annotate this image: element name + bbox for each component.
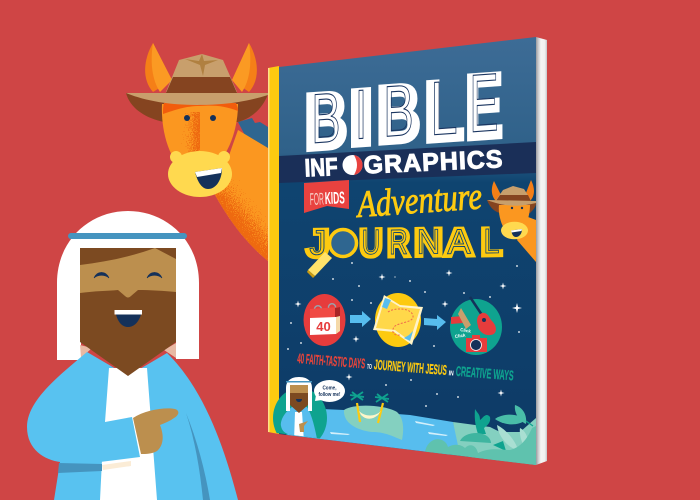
pie chart O (342, 155, 363, 175)
tagline (297, 353, 514, 380)
head top shadow (163, 103, 238, 114)
icon: creative tools circle: Click (454, 332, 466, 339)
title: BIBLE: L (430, 64, 458, 152)
book cover (279, 37, 536, 470)
tagline: IN (448, 370, 454, 378)
face (80, 248, 176, 298)
for kids ribbon: FOR (309, 190, 324, 209)
mini face (290, 385, 308, 393)
magnifying glass (307, 230, 356, 278)
hat brim (126, 93, 268, 105)
for kids ribbon: KIDS (324, 188, 345, 208)
hat pinch (185, 54, 218, 76)
tagline: JOURNEY WITH JESUS (374, 356, 448, 378)
book spine (268, 66, 279, 434)
title: INFOGRAPHICS (305, 150, 502, 177)
mini horse (487, 180, 536, 262)
eyes (94, 272, 162, 278)
title: BIBLE: L (424, 62, 464, 161)
icon: creative tools circle (450, 297, 502, 355)
title: BIBLE: B (383, 69, 414, 152)
journal title: N (417, 222, 440, 262)
cuff strip (102, 461, 131, 470)
title: BIBLE: B (376, 67, 421, 162)
palm leaves (350, 392, 389, 402)
journal title: U (362, 222, 380, 262)
white tunic (100, 368, 157, 500)
journal title: J (306, 221, 330, 266)
journal title: L (484, 221, 499, 261)
title: BIBLE: B (312, 79, 340, 159)
robe fold (186, 413, 210, 500)
journal title: J (309, 224, 327, 263)
speech bubble (314, 380, 345, 402)
horse neck (215, 130, 268, 261)
pointing hand (133, 408, 178, 454)
headband (68, 233, 187, 239)
horse eye left (184, 115, 190, 121)
horse head (162, 104, 238, 162)
mini head cloth (286, 377, 312, 411)
title: BIBLE: I (347, 73, 375, 164)
tagline: CREATIVE WAYS (455, 363, 514, 383)
mini hand (299, 421, 308, 432)
arrow 2 (424, 315, 446, 330)
journal title: A (443, 219, 475, 265)
craft brush (451, 308, 471, 329)
tagline: 40 FAITH-TASTIC DAYS (297, 350, 366, 371)
sleeve (60, 417, 140, 462)
hair (80, 248, 176, 265)
horse blue pack (238, 118, 268, 150)
mini beard (290, 393, 308, 413)
character: bearded man (27, 211, 238, 500)
journal title: N (413, 219, 444, 265)
mini figure (280, 377, 317, 438)
hat band (166, 77, 237, 93)
journal title: R (389, 222, 408, 262)
title: BIBLE: E (470, 56, 498, 149)
icon: calendar (304, 294, 346, 346)
waves (330, 421, 448, 436)
journal title: A (447, 222, 471, 262)
mini robe (280, 407, 317, 438)
click click label: Click (460, 327, 472, 334)
teal shore with foliage (425, 405, 536, 470)
arrow 1 (350, 311, 371, 327)
hat under-brim (126, 93, 268, 122)
title band (279, 142, 536, 183)
journal title: U (359, 221, 383, 265)
title: BIBLE (306, 71, 502, 152)
icon: treasure map (373, 293, 423, 347)
adventure script: Adventure (353, 175, 483, 226)
island with hammock (344, 392, 403, 440)
sea (279, 409, 462, 455)
speech bubble: Come, (322, 386, 337, 392)
mini teal circle (273, 391, 327, 438)
stars (287, 262, 522, 407)
beard (80, 290, 176, 376)
character: horse in explorer hat (126, 43, 268, 261)
title: INFOGRAPHICS: INF (304, 153, 338, 182)
hat crown (166, 54, 237, 92)
neck spray shading (215, 130, 268, 261)
book page edges (536, 37, 547, 465)
camera (466, 335, 487, 352)
mini man with speech bubble (273, 377, 345, 438)
horse eye right (210, 115, 216, 121)
horse mouth (195, 168, 222, 189)
guitar (470, 297, 496, 335)
mouth (114, 310, 142, 327)
sleeve shadow (58, 463, 102, 473)
tagline: TO (367, 364, 372, 371)
title: BIBLE: E (465, 54, 503, 160)
horse left ear (145, 43, 172, 92)
for kids ribbon (304, 180, 349, 213)
palm trunks (357, 403, 383, 423)
head cloth (57, 211, 199, 360)
cover background (279, 37, 536, 465)
head spray shading (163, 112, 200, 160)
horse muzzle (168, 151, 232, 197)
title: BIBLE: B (304, 76, 348, 168)
icon: calendar: 40 (316, 319, 331, 334)
journal title (304, 226, 504, 260)
speech bubble: follow me! (318, 392, 341, 398)
title: INFOGRAPHICS: GRAPHICS (363, 145, 503, 179)
horse right ear (232, 43, 257, 92)
journal title: L (480, 220, 503, 265)
title: BIBLE: I (355, 76, 367, 155)
journal title: R (387, 220, 410, 265)
hammock (359, 411, 381, 419)
neck (80, 343, 176, 358)
robe (27, 352, 238, 500)
